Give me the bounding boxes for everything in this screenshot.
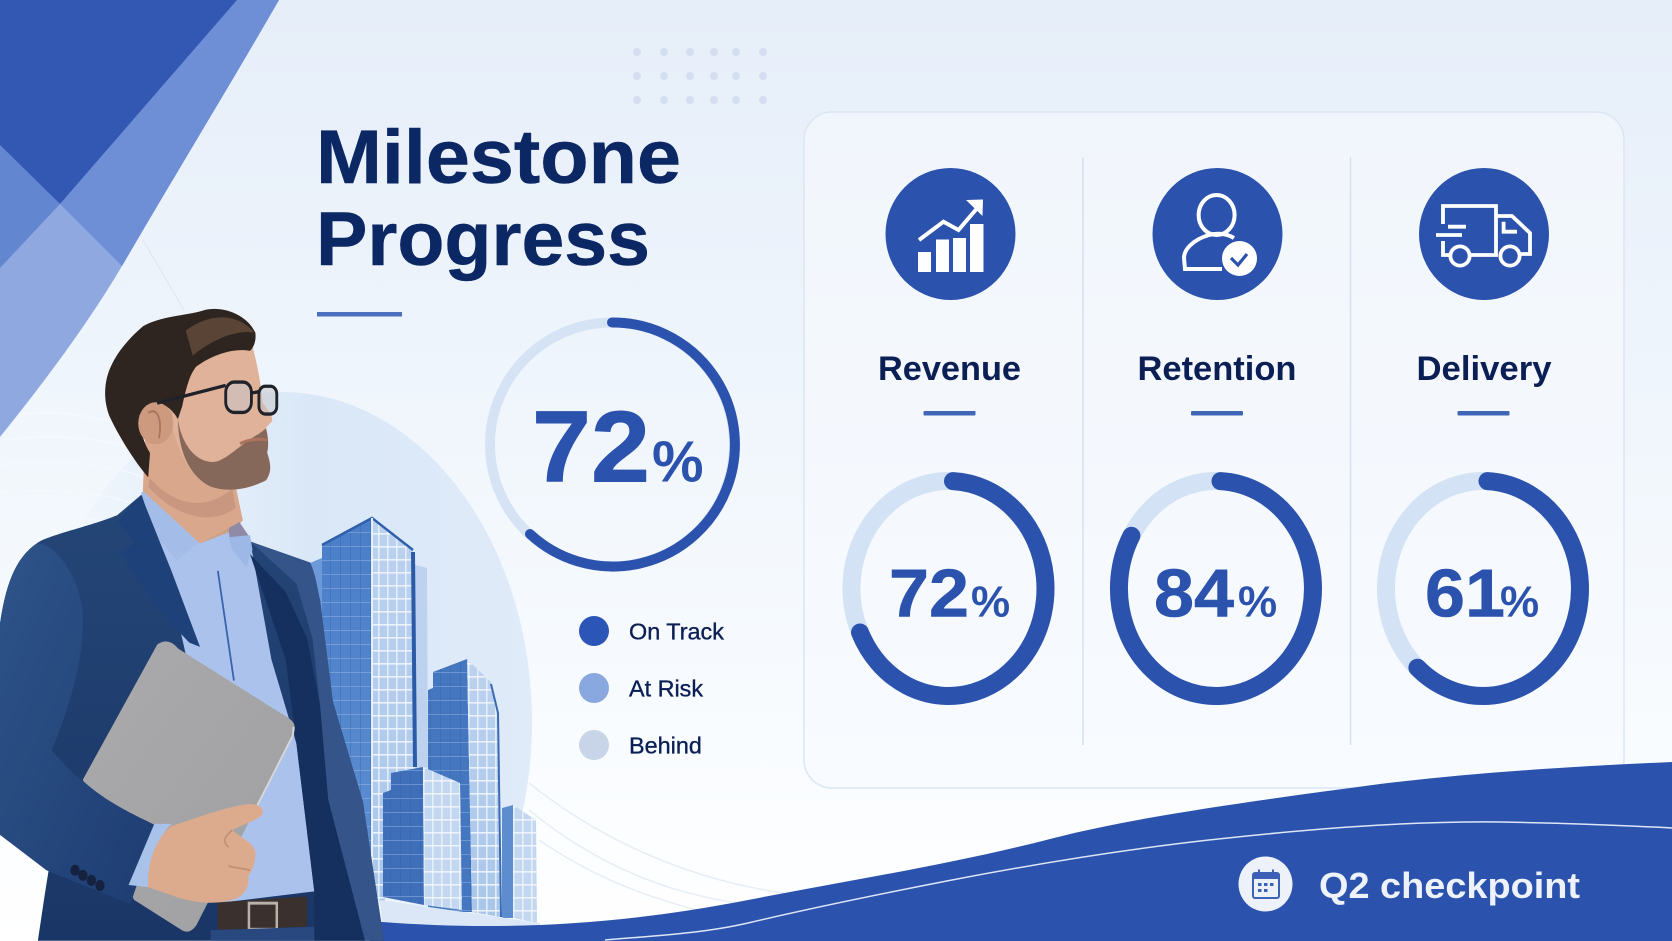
sleeve (0, 543, 157, 904)
background circle behind city (236, 392, 532, 922)
icon: delivery truck (1419, 168, 1549, 300)
belt (218, 896, 307, 930)
cuff (129, 824, 171, 887)
hand (148, 804, 263, 903)
head base (143, 373, 243, 544)
ear (138, 402, 173, 444)
dot grid decoration (633, 48, 767, 104)
icon: retention person (1152, 168, 1282, 300)
icon: revenue chart (886, 168, 1016, 300)
legend: At Risk (629, 676, 703, 702)
icon: calendar (1238, 856, 1292, 912)
overall value: 72 (532, 392, 650, 504)
shirt (141, 487, 314, 903)
retention ring: % (1238, 578, 1277, 627)
jacket right panel (250, 541, 384, 941)
label: revenue: Revenue (878, 350, 1021, 388)
shirt collar (141, 487, 200, 560)
footer label: Q2 checkpoint (1319, 865, 1580, 906)
revenue ring: 72 (889, 556, 969, 632)
revenue ring: % (971, 578, 1010, 627)
laptop (83, 641, 295, 932)
label: retention: Retention (1138, 350, 1296, 388)
overall percent sign: % (652, 430, 704, 494)
hair (105, 309, 256, 477)
glasses (157, 382, 277, 414)
label: delivery: Delivery (1416, 350, 1552, 388)
jacket inner front (250, 554, 365, 941)
delivery ring: % (1500, 578, 1539, 627)
beard (178, 419, 270, 490)
retention ring (1119, 481, 1313, 696)
revenue ring (852, 481, 1046, 696)
title: Milestone (316, 115, 681, 200)
corner geometric shapes (0, 0, 279, 437)
businessman with laptop (0, 309, 384, 941)
overall progress ring (490, 322, 735, 566)
panel: metrics card (804, 112, 1624, 788)
neck shadow (148, 478, 236, 517)
revenue underline (924, 411, 976, 416)
title (316, 115, 681, 282)
left lapel (118, 495, 200, 647)
retention underline (1191, 411, 1243, 416)
retention ring: 84 (1154, 556, 1234, 632)
delivery ring (1386, 481, 1580, 696)
bottom wave band (370, 762, 1672, 941)
legend: On Track (629, 618, 724, 644)
title: Progress (316, 197, 650, 282)
delivery underline (1458, 411, 1510, 416)
title underline (317, 312, 402, 316)
legend: Behind (629, 732, 702, 758)
trousers (211, 927, 314, 941)
legend (579, 616, 724, 760)
delivery ring: 61 (1425, 556, 1505, 632)
jacket body (0, 495, 384, 941)
face (171, 343, 272, 490)
city buildings (305, 518, 540, 930)
